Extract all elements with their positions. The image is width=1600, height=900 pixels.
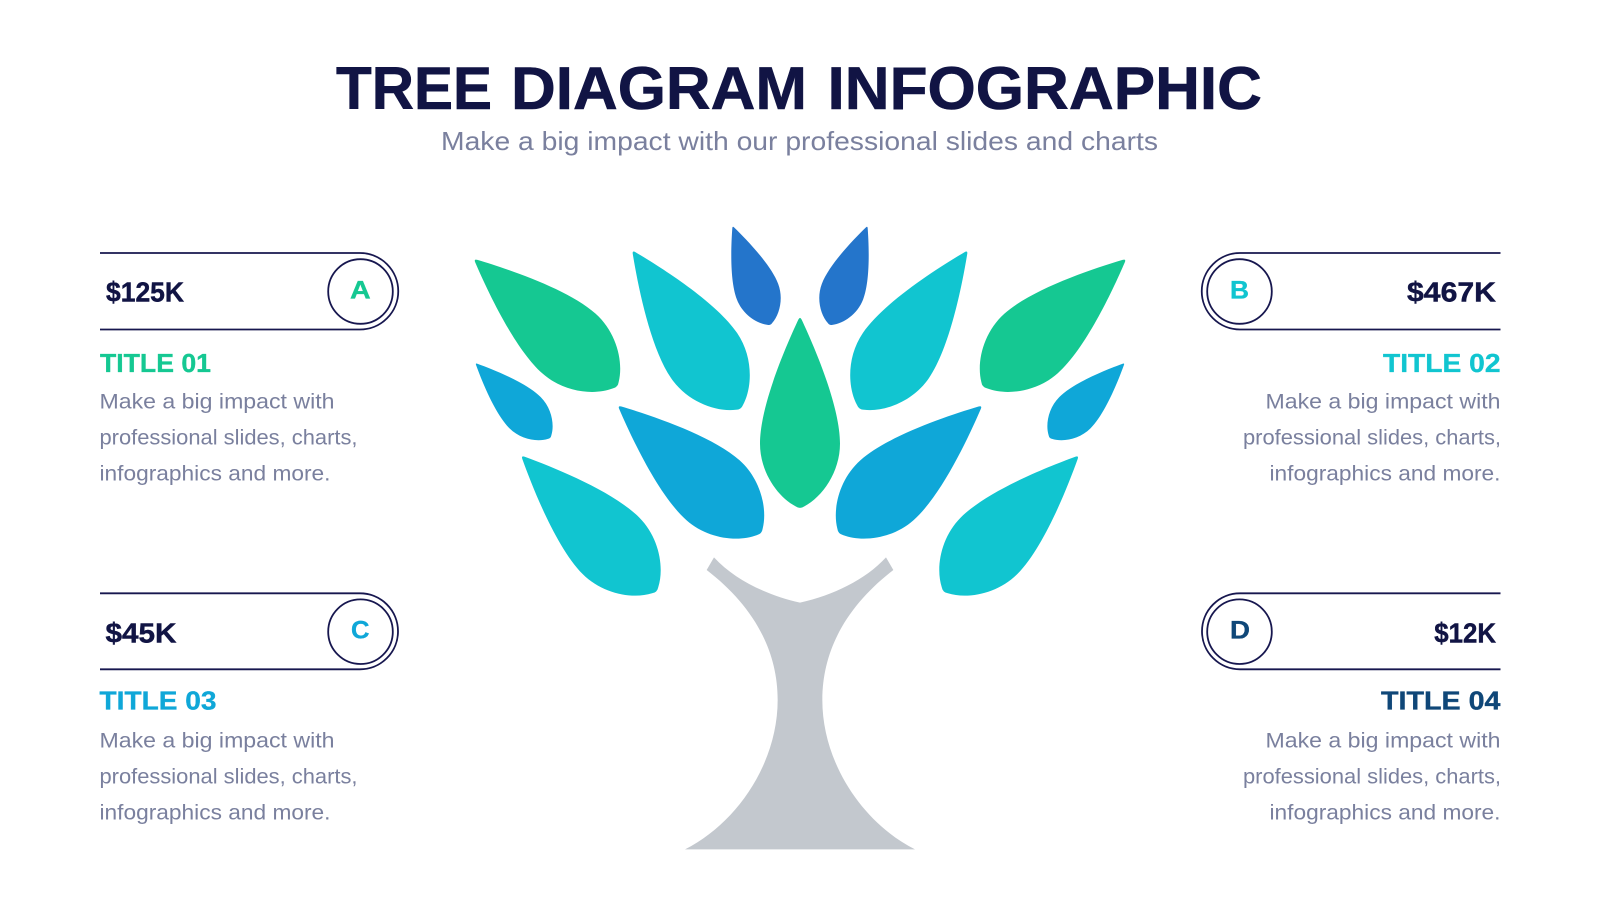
panel: A xyxy=(100,253,398,486)
description C: infographics and more. xyxy=(100,800,330,824)
left leaf: lower teal xyxy=(494,428,685,620)
value D: $12K xyxy=(1434,618,1496,649)
value C: $45K xyxy=(106,618,177,649)
title: DIAGRAM xyxy=(511,55,807,122)
description C: professional slides, charts, xyxy=(100,764,358,788)
badge letter A: A xyxy=(350,276,371,304)
description A: infographics and more. xyxy=(100,462,330,486)
title: TREE xyxy=(336,55,492,122)
description A: professional slides, charts, xyxy=(100,426,358,450)
heading B: TITLE 02 xyxy=(1383,348,1500,378)
left leaf: large green xyxy=(448,230,643,416)
panel: D xyxy=(1202,593,1501,824)
value B: $467K xyxy=(1407,277,1496,308)
description C xyxy=(100,728,358,824)
subtitle: Make a big impact with our professional slides and charts xyxy=(441,126,1158,156)
description C: Make a big impact with xyxy=(100,728,334,752)
heading D: TITLE 04 xyxy=(1381,685,1501,715)
value pill A xyxy=(100,253,398,330)
tree diagram xyxy=(448,219,1152,849)
right leaf: middle blue xyxy=(813,377,1008,563)
left leaf: middle blue xyxy=(592,377,787,563)
description D: infographics and more. xyxy=(1270,800,1500,824)
badge letter D: D xyxy=(1230,616,1250,644)
description B xyxy=(1243,390,1501,486)
right leaf: small blue xyxy=(1034,348,1140,453)
description D xyxy=(1243,728,1501,824)
description D: Make a big impact with xyxy=(1266,728,1500,752)
left leaf: upper teal xyxy=(600,229,773,431)
left leaf: top dark blue xyxy=(712,219,791,333)
badge letter B: B xyxy=(1230,276,1249,304)
heading A: TITLE 01 xyxy=(100,348,211,378)
panel: B xyxy=(1202,253,1501,486)
tree trunk xyxy=(685,557,915,849)
right leaf: upper teal xyxy=(827,229,1000,431)
right leaf: top dark blue xyxy=(809,219,888,333)
title xyxy=(336,55,1262,122)
description A xyxy=(100,390,358,486)
panel: C xyxy=(100,593,398,824)
badge circle D xyxy=(1207,599,1272,664)
description D: professional slides, charts, xyxy=(1243,764,1501,788)
description B: infographics and more. xyxy=(1270,462,1500,486)
description A: Make a big impact with xyxy=(100,390,334,414)
badge circle B xyxy=(1207,259,1272,324)
heading C: TITLE 03 xyxy=(100,685,216,715)
center leaf: green xyxy=(760,318,840,508)
badge letter C: C xyxy=(351,616,370,644)
value pill C xyxy=(100,593,398,669)
right leaf: large green xyxy=(957,230,1152,416)
badge circle C xyxy=(328,599,393,664)
description B: professional slides, charts, xyxy=(1243,426,1501,450)
left leaf: small blue xyxy=(460,348,566,453)
right leaf: lower teal xyxy=(915,428,1106,620)
description B: Make a big impact with xyxy=(1266,390,1500,414)
title: INFOGRAPHIC xyxy=(828,55,1262,122)
badge circle A xyxy=(328,259,393,324)
value pill D xyxy=(1202,593,1500,669)
value A: $125K xyxy=(106,277,184,308)
value pill B xyxy=(1202,253,1500,330)
